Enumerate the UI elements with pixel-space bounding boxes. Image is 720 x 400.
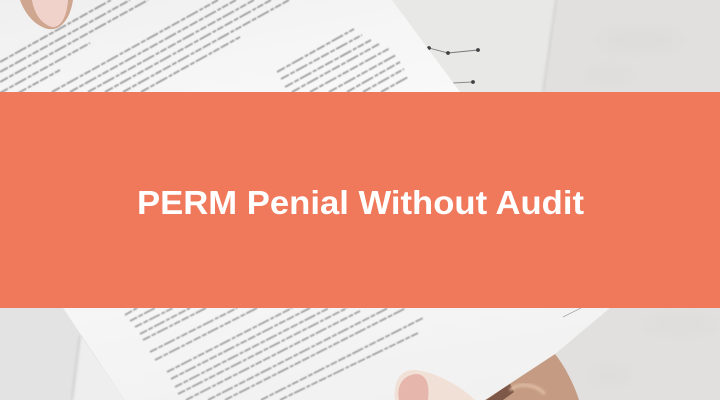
document text lines, bottom sheet [125, 308, 423, 400]
orange title band [0, 92, 720, 308]
main sheet, bottom [63, 308, 610, 400]
line chart marks [427, 46, 480, 84]
title: PERM Penial Without Audit [137, 184, 584, 221]
lower left underlying sheet [0, 308, 125, 400]
second sheet, top right [380, 0, 556, 92]
hand behind sheet, bottom right [485, 354, 579, 400]
main sheet, top [0, 0, 460, 92]
small rule on bottom sheet corner [563, 308, 581, 317]
thumb, bottom center [395, 370, 475, 400]
document text lines, top sheet [0, 0, 408, 103]
fingertip, top left [20, 0, 73, 29]
